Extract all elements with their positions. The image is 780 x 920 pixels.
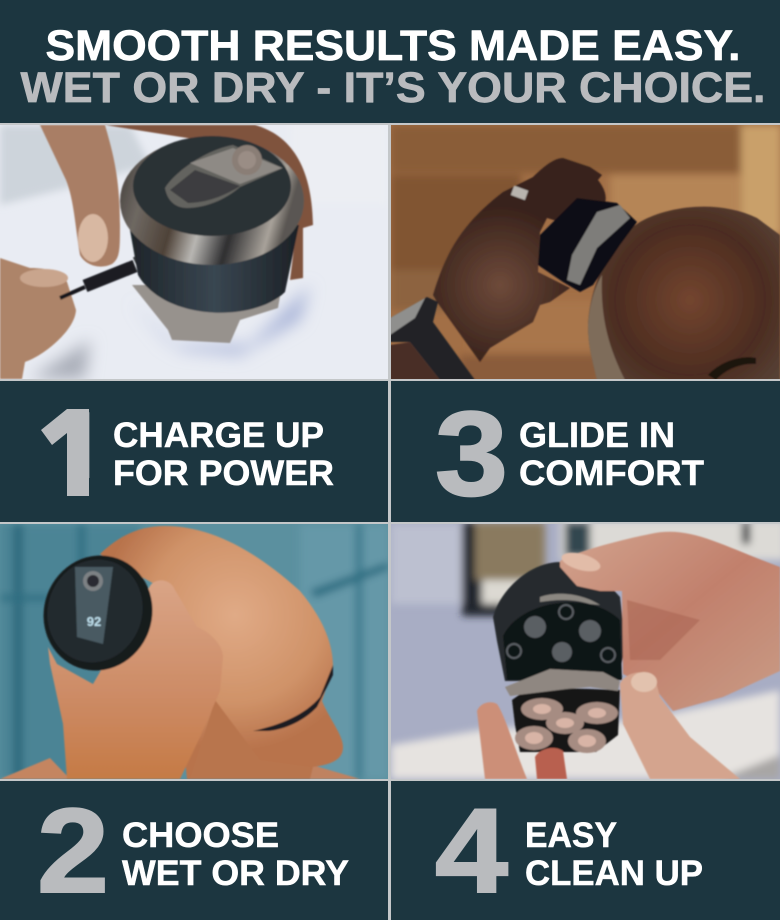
- icon: chrome plate: [165, 145, 283, 208]
- icon: arm: [390, 342, 440, 380]
- panel: step 1: [0, 381, 388, 522]
- icon: heads: [512, 687, 620, 752]
- icon: shoulders: [0, 758, 70, 779]
- number 1: 1: [44, 386, 112, 522]
- icon: head: [100, 526, 343, 779]
- icon: hand: [48, 580, 223, 779]
- photo: gliding on the scalp: [390, 125, 780, 385]
- icon: shaver base: [132, 285, 282, 343]
- panel: step 2: [0, 781, 388, 920]
- step 1 label: CHARGE UP: [113, 415, 324, 455]
- icon: eyebrow: [253, 665, 333, 731]
- icon: ring: [511, 186, 528, 200]
- icon: shaver body: [130, 225, 299, 313]
- step 4 label: EASY: [525, 815, 617, 855]
- icon: chrome bridge: [505, 669, 620, 696]
- icon: shaver body: [493, 562, 623, 681]
- number 2: 2: [37, 784, 109, 918]
- step 4 label: CLEAN UP: [525, 853, 703, 893]
- number 4: 4: [435, 784, 508, 918]
- icon: bald head: [588, 207, 780, 380]
- number 3: 3: [435, 387, 508, 521]
- icon: index finger: [40, 125, 120, 267]
- shaver display: 92: [87, 614, 101, 629]
- step 2 label: WET OR DRY: [122, 853, 349, 893]
- title: WET OR DRY - IT’S YOUR CHOICE.: [20, 64, 766, 112]
- step 2 label: CHOOSE: [122, 815, 279, 855]
- icon: dark hand: [433, 158, 606, 362]
- icon: watch: [390, 297, 475, 380]
- photo: cleaning the heads: [391, 520, 780, 779]
- icon: shaver side: [538, 198, 637, 292]
- icon: shaver top: [133, 136, 291, 236]
- step 3 label: COMFORT: [519, 453, 704, 493]
- icon: back fingers: [105, 125, 313, 280]
- icon: cable: [60, 255, 150, 298]
- icon: fingers: [477, 672, 740, 779]
- step 1 label: FOR POWER: [113, 453, 334, 493]
- header band: [0, 0, 780, 123]
- title: [20, 22, 766, 112]
- title: SMOOTH RESULTS MADE EASY.: [46, 22, 741, 70]
- icon: right hand: [560, 532, 780, 711]
- photo: head with shaver, wet: [0, 524, 388, 779]
- icon: shaver rim: [120, 137, 304, 265]
- panel: step 4: [391, 781, 780, 920]
- icon: front fingers: [0, 258, 76, 379]
- step 3 label: GLIDE IN: [519, 415, 675, 455]
- icon: coils: [524, 616, 601, 662]
- photo: charging the shaver: [0, 125, 388, 379]
- panel: step 3: [391, 381, 780, 522]
- icon: shaver: [42, 554, 154, 672]
